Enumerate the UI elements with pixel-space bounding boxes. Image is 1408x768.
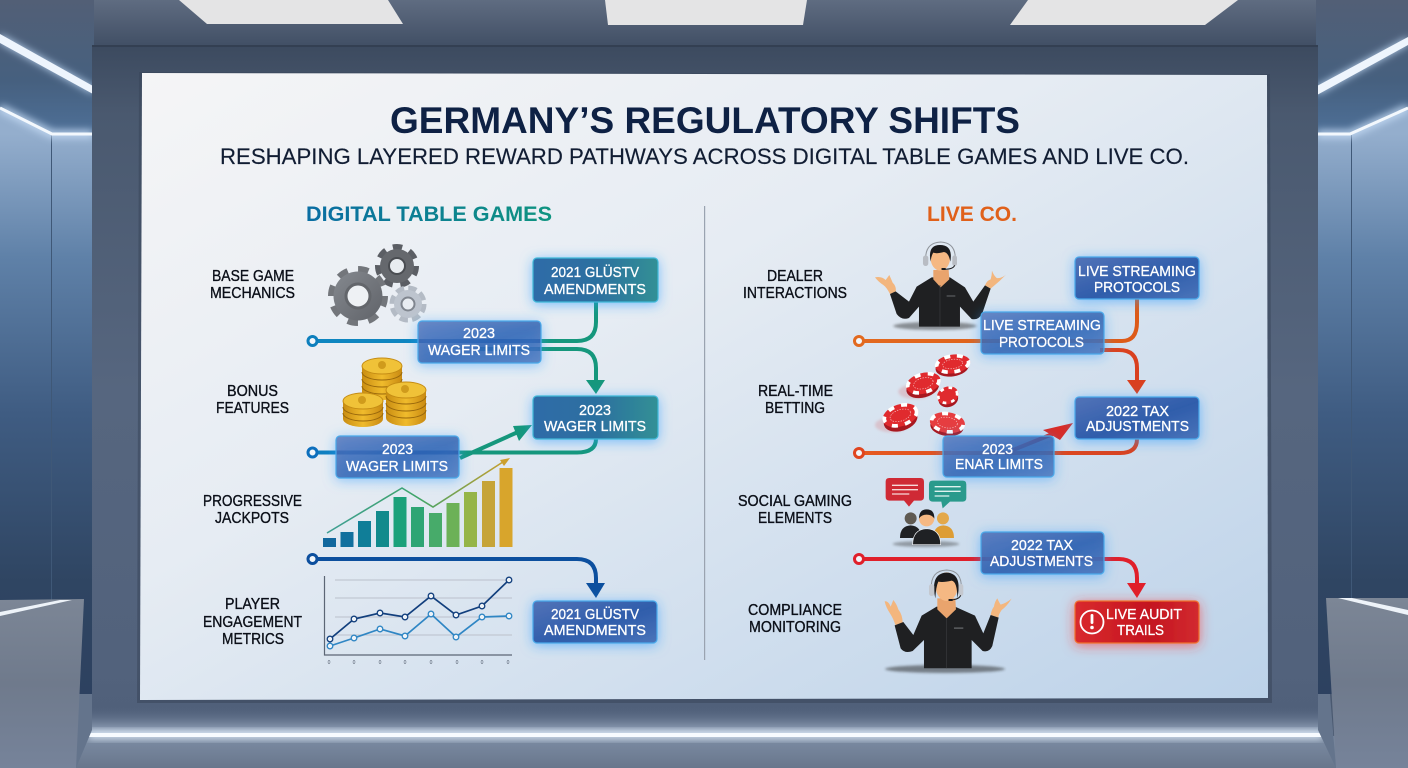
icon: compliance monitor with headset bbox=[885, 570, 1012, 673]
heading: live co: LIVE CO. bbox=[927, 203, 1017, 226]
label: compliance monitoring: COMPLIANCE bbox=[748, 602, 842, 619]
box: 2023 wager limits top bbox=[418, 321, 541, 363]
box: 2021 glustv amendments: AMENDMENTS bbox=[544, 281, 646, 298]
pathway 3 line live bbox=[854, 554, 1146, 598]
box: 2023 enar limits: ENAR LIMITS bbox=[955, 456, 1043, 473]
label: social gaming elements: SOCIAL GAMING bbox=[738, 493, 852, 510]
box: 2022 tax adjustments lower bbox=[981, 532, 1104, 574]
label: base game mechanics: MECHANICS bbox=[210, 285, 295, 302]
label: compliance monitoring bbox=[748, 602, 842, 636]
label: bonus features: BONUS bbox=[227, 383, 278, 400]
box: 2023 wager limits top: 2023 bbox=[463, 325, 495, 342]
label: dealer interactions bbox=[743, 268, 847, 302]
label: real-time betting: REAL-TIME bbox=[758, 383, 833, 400]
box: live audit trails alert: LIVE AUDIT bbox=[1106, 606, 1182, 623]
box: 2023 wager limits top: WAGER LIMITS bbox=[428, 342, 530, 359]
pathway 1 lines digital bbox=[308, 302, 605, 394]
label: player engagement metrics bbox=[203, 596, 302, 648]
label: bonus features: FEATURES bbox=[216, 400, 289, 417]
box: live streaming protocols lower: LIVE STREAMING bbox=[983, 317, 1101, 334]
label: progressive jackpots: PROGRESSIVE bbox=[203, 493, 302, 510]
display screen panel bbox=[140, 73, 1268, 700]
screen shadow bbox=[137, 72, 1272, 703]
floor light strip bbox=[88, 731, 1323, 739]
chart: engagement line chart: 0 bbox=[456, 660, 459, 666]
label: dealer interactions: INTERACTIONS bbox=[743, 285, 847, 302]
subtitle: RESHAPING LAYERED REWARD PATHWAYS ACROSS DIGITAL TABLE GAMES AND LIVE CO. bbox=[220, 144, 1189, 169]
box: 2023 wager limits lower bbox=[336, 436, 459, 478]
box: live streaming protocols upper bbox=[1075, 257, 1199, 299]
chart: engagement line chart: 0 bbox=[328, 660, 331, 666]
box: 2023 enar limits: 2023 bbox=[982, 441, 1013, 458]
box: 2023 wager limits target: WAGER LIMITS bbox=[544, 418, 646, 435]
box: 2023 wager limits target: 2023 bbox=[579, 402, 611, 419]
icon: alert bbox=[1080, 610, 1104, 634]
label: player engagement metrics: METRICS bbox=[222, 631, 284, 648]
label: bonus features bbox=[216, 383, 289, 417]
left side wall bbox=[0, 0, 94, 694]
chart: engagement line chart: 0 bbox=[430, 660, 433, 666]
box: 2022 tax adjustments upper: 2022 TAX bbox=[1106, 403, 1169, 420]
icon: social chat group bbox=[886, 478, 966, 547]
box: 2023 wager limits target bbox=[533, 396, 658, 439]
box: live streaming protocols upper: PROTOCOLS bbox=[1094, 279, 1180, 296]
chart: engagement line chart: 0 bbox=[507, 660, 510, 666]
label: base game mechanics bbox=[210, 268, 295, 302]
label: base game mechanics: BASE GAME bbox=[212, 268, 294, 285]
pathway 2 lines digital bbox=[308, 425, 596, 458]
floor bbox=[0, 736, 1408, 768]
pathway 3 line digital bbox=[308, 554, 605, 598]
box: live audit trails alert: TRAILS bbox=[1117, 622, 1164, 639]
center divider bbox=[704, 206, 705, 660]
label: dealer interactions: DEALER bbox=[767, 268, 823, 285]
ceiling bbox=[0, 0, 1408, 46]
label: progressive jackpots bbox=[203, 493, 302, 527]
label: social gaming elements: ELEMENTS bbox=[758, 510, 832, 527]
wall frame around screen bbox=[90, 45, 1320, 737]
chart: engagement line chart bbox=[324, 576, 512, 666]
box: 2022 tax adjustments lower: 2022 TAX bbox=[1011, 537, 1073, 554]
label: player engagement metrics: PLAYER bbox=[225, 596, 280, 613]
chart: jackpot bars bbox=[323, 458, 512, 547]
label: progressive jackpots: JACKPOTS bbox=[215, 510, 289, 527]
chart: engagement line chart: 0 bbox=[379, 660, 382, 666]
icon: red betting chips bbox=[875, 352, 972, 438]
icon: dealer with headset bbox=[875, 242, 1006, 330]
label: player engagement metrics: ENGAGEMENT bbox=[203, 614, 302, 631]
label: compliance monitoring: MONITORING bbox=[749, 619, 841, 636]
box: 2021 glustv amendments lower: 2021 GLÜSTV bbox=[551, 605, 639, 623]
chart: engagement line chart: 0 bbox=[404, 660, 407, 666]
label: real-time betting bbox=[758, 383, 833, 417]
box: 2021 glustv amendments lower bbox=[533, 601, 657, 643]
box: live streaming protocols lower bbox=[981, 312, 1104, 354]
chart: engagement line chart: 0 bbox=[481, 660, 484, 666]
pathway 1 lines live bbox=[854, 299, 1146, 394]
label: social gaming elements bbox=[738, 493, 852, 527]
box: 2021 glustv amendments: 2021 GLÜSTV bbox=[551, 263, 639, 281]
left pedestal bbox=[0, 599, 92, 768]
right side wall bbox=[1316, 0, 1408, 694]
box: 2022 tax adjustments lower: ADJUSTMENTS bbox=[990, 553, 1093, 570]
box: live streaming protocols lower: PROTOCOLS bbox=[999, 334, 1084, 351]
box: 2022 tax adjustments upper bbox=[1075, 397, 1199, 439]
right pedestal bbox=[1318, 598, 1408, 768]
box: 2021 glustv amendments bbox=[533, 258, 658, 302]
box: 2023 enar limits bbox=[943, 436, 1054, 477]
chart: engagement line chart: 0 bbox=[353, 660, 356, 666]
box: 2023 wager limits lower: WAGER LIMITS bbox=[346, 458, 448, 475]
heading: digital table games: DIGITAL TABLE GAMES bbox=[306, 203, 552, 226]
icon: coin stacks bbox=[343, 358, 426, 427]
box: 2022 tax adjustments upper: ADJUSTMENTS bbox=[1086, 418, 1189, 435]
box: 2023 wager limits lower: 2023 bbox=[382, 441, 413, 458]
box: 2021 glustv amendments lower: AMENDMENTS bbox=[544, 622, 646, 639]
title: GERMANY’S REGULATORY SHIFTS bbox=[390, 100, 1020, 141]
icon: gears bbox=[332, 248, 424, 322]
label: real-time betting: BETTING bbox=[765, 400, 825, 417]
pathway 2 lines live bbox=[854, 423, 1137, 458]
box: live streaming protocols upper: LIVE STREAMING bbox=[1078, 263, 1196, 280]
box: live audit trails alert bbox=[1075, 601, 1199, 643]
